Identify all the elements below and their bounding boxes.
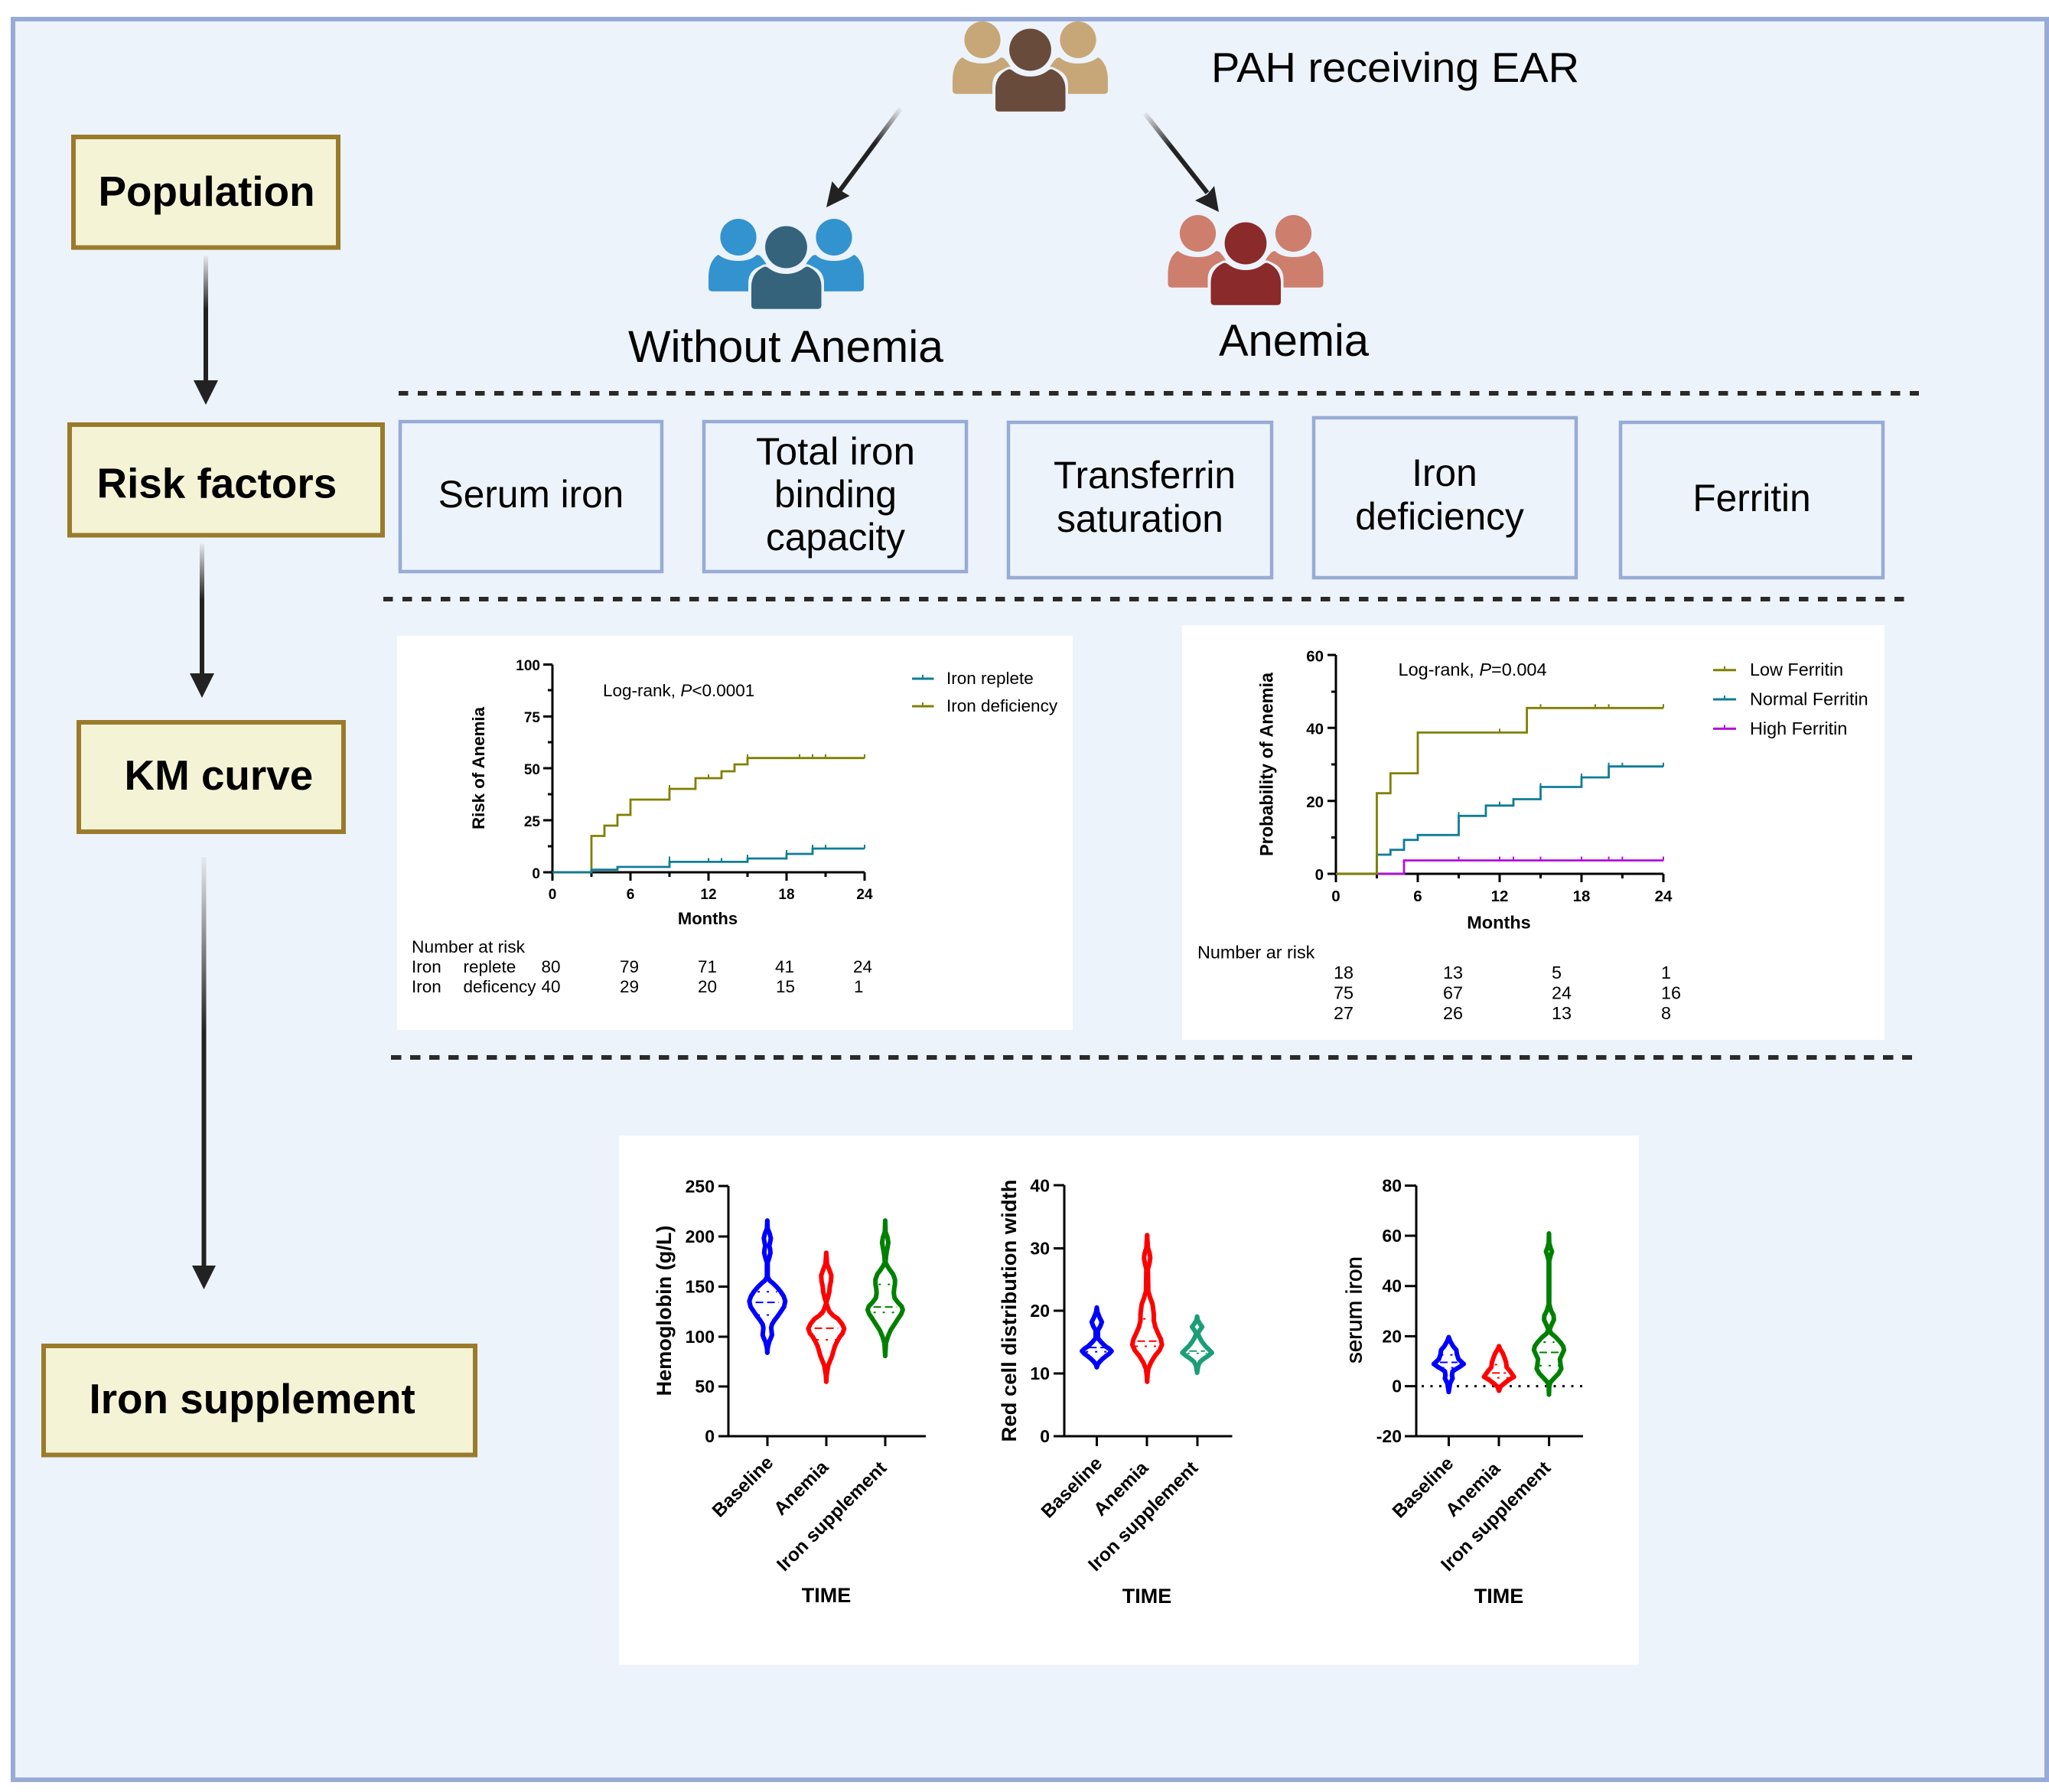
violins	[1082, 1235, 1212, 1382]
y tick labels: 30	[1030, 1238, 1050, 1258]
category labels: Anemia	[1442, 1458, 1504, 1521]
y tick labels: 0	[705, 1426, 715, 1446]
risk factor: iron deficiency: deficiency	[1355, 495, 1524, 538]
category labels: Baseline	[709, 1452, 777, 1522]
x tick labels: 18	[778, 887, 795, 903]
icon: anemia group	[1168, 215, 1324, 305]
step box: iron supplement	[44, 1346, 475, 1455]
category labels: Baseline	[1038, 1453, 1106, 1523]
panel: KM curve iron status	[397, 636, 1073, 1030]
violin: baseline	[749, 1220, 785, 1353]
risk factor: total iron binding capacity	[704, 422, 966, 572]
number at risk table: 27	[1334, 1003, 1354, 1023]
heading: PAH receiving EAR: PAH receiving EAR	[1211, 44, 1579, 91]
arrow: KM curve to iron supplement	[192, 857, 216, 1289]
x tick labels: 24	[1655, 888, 1673, 905]
axes	[1405, 1186, 1583, 1446]
curve: iron deficiency	[552, 754, 865, 872]
number at risk table: deficency	[464, 977, 536, 996]
violins	[749, 1220, 903, 1382]
annotation: log-rank: Log-rank, P<0.0001	[603, 681, 754, 700]
violin: anemia	[1132, 1235, 1162, 1382]
x axis title: TIME	[1474, 1585, 1523, 1608]
legend: Normal Ferritin	[1750, 689, 1868, 709]
curve: high ferritin	[1377, 857, 1663, 874]
y tick labels: 0	[1392, 1377, 1402, 1396]
number at risk table: 40	[542, 977, 561, 996]
category labels: Iron supplement	[1084, 1458, 1202, 1575]
category labels: Baseline	[1389, 1453, 1458, 1523]
number at risk table: 1	[854, 977, 864, 996]
y tick labels: 10	[1030, 1364, 1050, 1383]
y tick labels: 25	[524, 814, 540, 830]
panel: violin plots	[619, 1135, 1639, 1665]
chart: hemoglobin	[653, 1177, 926, 1607]
axis title: probability of anemia: Probability of Anemia	[1256, 672, 1278, 856]
violin: iron supplement	[1534, 1233, 1564, 1395]
number at risk table: 13	[1443, 963, 1463, 982]
arrow: to anemia	[1145, 113, 1219, 212]
x tick labels: 6	[1413, 888, 1422, 905]
curve: low ferritin	[1336, 704, 1663, 874]
number at risk table: Number ar risk	[1197, 943, 1315, 963]
legend	[1713, 660, 1868, 738]
y tick labels: 0	[1315, 866, 1324, 884]
step box: population	[73, 137, 338, 248]
x tick labels: 0	[549, 887, 556, 903]
y axis title: serum iron	[1342, 1256, 1367, 1364]
risk factor: serum iron: Serum iron	[438, 473, 624, 516]
number at risk table: 8	[1661, 1003, 1671, 1023]
x axis title: TIME	[1122, 1585, 1171, 1608]
y tick labels: 150	[686, 1276, 715, 1296]
number at risk table: 1	[1661, 963, 1671, 982]
number at risk table: 13	[1552, 1003, 1572, 1023]
number at risk table	[412, 937, 872, 996]
violin: anemia	[1484, 1346, 1514, 1391]
y tick labels: 20	[1306, 793, 1324, 811]
number at risk table	[1197, 943, 1681, 1023]
y axis title: Red cell distribution width	[998, 1180, 1021, 1442]
y tick labels: -20	[1376, 1426, 1402, 1446]
panel: KM curve ferritin	[1182, 625, 1884, 1040]
legend	[912, 669, 1058, 715]
chart: serum iron	[1342, 1175, 1583, 1608]
number at risk table: 26	[1443, 1003, 1463, 1023]
legend: High Ferritin	[1750, 718, 1847, 738]
y tick labels: 40	[1306, 721, 1324, 738]
y tick labels	[686, 1177, 715, 1446]
y tick labels: 20	[1382, 1326, 1402, 1346]
icon: PAH patient group	[953, 21, 1108, 112]
risk factor: transferrin saturation: Transferrin	[1054, 454, 1236, 497]
category labels: Iron supplement	[773, 1458, 891, 1575]
risk factor: transferrin saturation: saturation	[1057, 497, 1223, 540]
category labels: Anemia	[770, 1457, 832, 1520]
category labels	[1038, 1453, 1202, 1575]
x tick labels: 0	[1331, 888, 1340, 905]
number at risk table: 24	[1552, 982, 1572, 1002]
step box: KM curve	[79, 722, 344, 832]
step box: iron supplement: Iron supplement	[89, 1375, 415, 1422]
y tick labels: 50	[695, 1377, 715, 1396]
chart: red cell distribution width	[998, 1175, 1232, 1608]
step box: KM curve: KM curve	[124, 751, 313, 799]
y tick labels: 100	[516, 658, 540, 674]
axes	[1054, 1185, 1232, 1446]
violin: iron supplement	[1182, 1317, 1212, 1373]
zero reference line	[1422, 1385, 1582, 1387]
risk factor: iron deficiency	[1314, 418, 1576, 578]
y tick labels: 50	[524, 762, 540, 778]
arrow: to without anemia	[826, 109, 901, 207]
number at risk table: 29	[620, 977, 639, 996]
number at risk table: Iron	[412, 957, 441, 976]
legend: Low Ferritin	[1750, 660, 1843, 679]
icon: without anemia group	[709, 219, 864, 309]
number at risk table: 20	[698, 977, 717, 996]
step box: risk factors: Risk factors	[96, 459, 337, 507]
category labels: Iron supplement	[1437, 1458, 1555, 1575]
category labels	[709, 1452, 891, 1575]
x tick labels: 18	[1573, 888, 1590, 905]
risk factor: total iron binding capacity: binding	[774, 473, 897, 516]
y tick labels: 80	[1382, 1175, 1402, 1195]
risk factor: total iron binding capacity: capacity	[766, 516, 905, 559]
number at risk table: 67	[1443, 982, 1463, 1002]
y tick labels: 40	[1030, 1175, 1050, 1195]
y tick labels	[1030, 1175, 1050, 1446]
y tick labels	[1376, 1175, 1402, 1446]
y tick labels: 0	[1040, 1426, 1050, 1446]
label: anemia: Anemia	[1219, 316, 1370, 366]
category labels	[1389, 1453, 1555, 1575]
step box: population: Population	[98, 168, 315, 215]
legend: Iron replete	[946, 669, 1034, 688]
y tick labels: 100	[686, 1327, 715, 1347]
y tick labels: 75	[524, 710, 540, 726]
curve: iron replete	[552, 845, 865, 872]
y tick labels: 20	[1030, 1301, 1050, 1321]
number at risk table: 71	[698, 957, 717, 976]
x tick labels: 12	[700, 887, 717, 903]
y axis title: Hemoglobin (g/L)	[653, 1226, 676, 1396]
x tick labels: 24	[856, 887, 873, 903]
curve: normal ferritin	[1377, 763, 1663, 874]
violin: baseline	[1434, 1337, 1464, 1392]
violins	[1434, 1233, 1564, 1395]
axes	[718, 1186, 926, 1446]
y tick labels: 60	[1382, 1226, 1402, 1246]
number at risk table: Iron	[412, 977, 441, 996]
arrow: population to risk factors	[194, 256, 218, 405]
axis title: risk of anemia: Risk of Anemia	[469, 707, 488, 829]
y tick labels: 0	[532, 866, 540, 882]
number at risk table: 41	[775, 957, 794, 976]
number at risk table: 18	[1334, 963, 1354, 982]
number at risk table: 79	[620, 957, 639, 976]
axes	[543, 664, 865, 881]
x tick labels: 12	[1491, 888, 1508, 905]
arrow: risk factors to KM curve	[190, 543, 214, 698]
number at risk table: 15	[776, 977, 795, 996]
risk factor: iron deficiency: Iron	[1412, 451, 1477, 494]
number at risk table: 75	[1334, 982, 1354, 1002]
number at risk table: 16	[1661, 982, 1681, 1002]
annotation: log-rank: Log-rank, P=0.004	[1399, 660, 1547, 679]
label: without anemia: Without Anemia	[628, 322, 944, 372]
axis title: months: Months	[1467, 912, 1531, 932]
number at risk table: 24	[853, 957, 872, 976]
x tick labels	[1331, 888, 1673, 905]
x tick labels	[549, 887, 873, 903]
y tick labels: 200	[686, 1227, 715, 1246]
number at risk table: replete	[464, 957, 516, 976]
risk factor: total iron binding capacity: Total iron	[756, 430, 915, 473]
category labels: Anemia	[1090, 1458, 1152, 1520]
violin: iron supplement	[868, 1220, 903, 1356]
axes	[1327, 655, 1663, 882]
risk factor: ferritin	[1621, 422, 1883, 578]
number at risk table: Number at risk	[412, 937, 526, 956]
violin: baseline	[1082, 1308, 1112, 1367]
risk factor: transferrin saturation	[1008, 422, 1272, 578]
step box: risk factors	[70, 425, 383, 536]
risk factor: ferritin: Ferritin	[1692, 477, 1811, 520]
y tick labels	[516, 658, 540, 882]
y tick labels	[1306, 647, 1324, 884]
y tick labels: 60	[1306, 647, 1324, 666]
x axis title: TIME	[802, 1584, 851, 1607]
number at risk table: 5	[1552, 963, 1562, 982]
x tick labels: 6	[627, 887, 634, 903]
violin: anemia	[808, 1253, 844, 1382]
axis title: months: Months	[678, 909, 738, 928]
legend: Iron deficiency	[946, 696, 1058, 715]
risk factor: serum iron	[400, 422, 662, 572]
y tick labels: 250	[686, 1177, 715, 1197]
y tick labels: 40	[1382, 1276, 1402, 1296]
number at risk table: 80	[542, 957, 561, 976]
